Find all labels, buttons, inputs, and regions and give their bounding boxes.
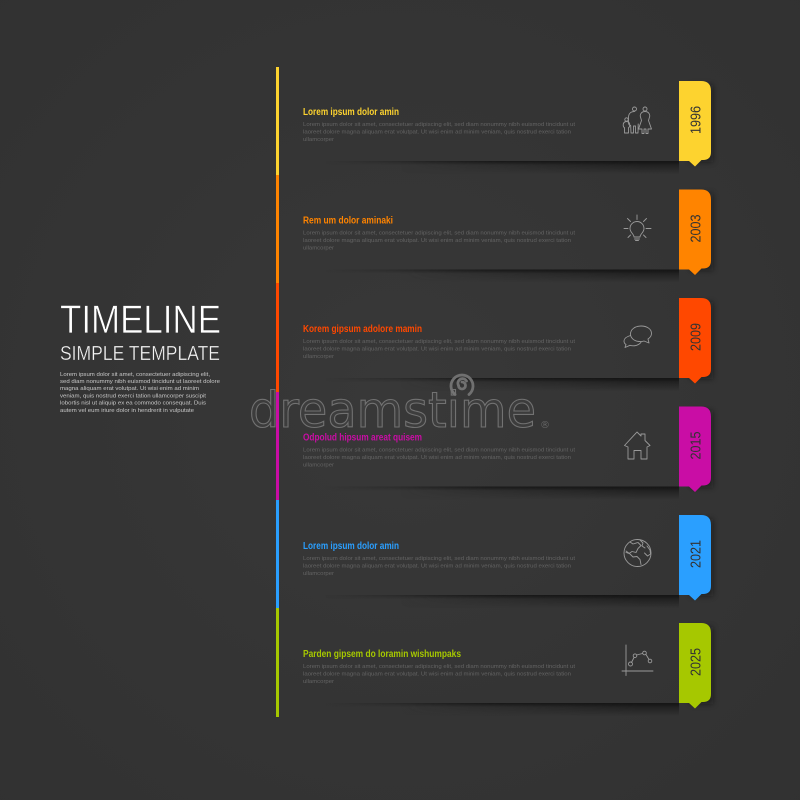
year: 2003	[688, 214, 704, 242]
year tab	[679, 623, 711, 708]
item description: laoreet dolore magna aliquam erat volutpat. Ut wisi enim ad minim veniam, quis nostrud exerci tation	[303, 346, 571, 352]
heading block	[60, 298, 221, 414]
item: 2021	[303, 515, 713, 608]
item: 2025	[303, 623, 713, 716]
tab shadow	[690, 194, 713, 270]
year: 1996	[688, 106, 704, 134]
watermark	[249, 375, 550, 439]
icon: globe	[624, 540, 651, 566]
watermark registered mark: ®	[540, 420, 550, 431]
year tab	[679, 298, 711, 384]
intro text	[60, 372, 220, 414]
item description: Lorem ipsum dolor sit amet, consectetuer adipiscing elit, sed diam nonummy nibh euismod tincidunt ut	[303, 230, 575, 236]
tab shadow	[690, 627, 713, 704]
tab shadow	[690, 85, 713, 162]
intro text: lobortis nisl ut aliquip ex ea commodo consequat. Duis	[60, 400, 206, 406]
timeline vertical line	[276, 67, 279, 717]
icon: speech bubbles	[624, 326, 652, 348]
item description	[303, 122, 575, 143]
year: 2015	[688, 432, 704, 460]
item description: ullamcorper	[303, 462, 334, 468]
item description: ullamcorper	[303, 137, 334, 143]
item description	[303, 230, 575, 252]
year tab	[679, 190, 711, 275]
item: 2015	[303, 406, 713, 500]
item: 2003	[303, 190, 713, 282]
icon: house	[624, 432, 650, 459]
card shadow	[378, 703, 679, 712]
item heading: Parden gipsem do loramin wishumpaks	[303, 649, 461, 660]
item description: laoreet dolore magna aliquam erat volutpat. Ut wisi enim ad minim veniam, quis nostrud exerci tation	[303, 238, 571, 244]
intro text: Lorem ipsum dolor sit amet, consectetuer adipiscing elit,	[60, 372, 210, 378]
card shadow	[378, 161, 679, 170]
intro text: veniam, quis nostrud exerci tation ullamcorper suscipit	[60, 394, 206, 400]
item: 1996	[303, 81, 713, 174]
item description	[303, 664, 575, 685]
subtitle: SIMPLE TEMPLATE	[60, 342, 220, 365]
card shadow	[373, 270, 679, 279]
item description: Lorem ipsum dolor sit amet, consectetuer adipiscing elit, sed diam nonummy nibh euismod tincidunt ut	[303, 556, 575, 562]
item description: laoreet dolore magna aliquam erat volutpat. Ut wisi enim ad minim veniam, quis nostrud exerci tation	[303, 564, 571, 570]
year tab	[679, 515, 711, 600]
tab shadow	[690, 410, 713, 488]
icon: line chart	[622, 645, 653, 676]
item description: ullamcorper	[303, 571, 334, 577]
item description: Lorem ipsum dolor sit amet, consectetuer adipiscing elit, sed diam nonummy nibh euismod tincidunt ut	[303, 664, 575, 670]
item description: Lorem ipsum dolor sit amet, consectetuer adipiscing elit, sed diam nonummy nibh euismod tincidunt ut	[303, 339, 575, 345]
item description: ullamcorper	[303, 679, 334, 685]
item description: laoreet dolore magna aliquam erat volutpat. Ut wisi enim ad minim veniam, quis nostrud exerci tation	[303, 672, 571, 678]
item description: ullamcorper	[303, 354, 334, 360]
item description: Lorem ipsum dolor sit amet, consectetuer adipiscing elit, sed diam nonummy nibh euismod tincidunt ut	[303, 448, 575, 454]
item heading: Odpolud hipsum areat quisem	[303, 432, 422, 444]
item heading: Rem um dolor aminaki	[303, 216, 393, 226]
item: 2009	[303, 298, 713, 391]
watermark spiral	[451, 375, 473, 394]
item description: laoreet dolore magna aliquam erat volutpat. Ut wisi enim ad minim veniam, quis nostrud exerci tation	[303, 130, 571, 136]
card shadow	[378, 595, 679, 604]
tab shadow	[690, 519, 713, 596]
year: 2021	[688, 540, 704, 568]
item heading: Lorem ipsum dolor amin	[303, 541, 399, 552]
item description	[303, 339, 575, 360]
watermark wordmark: dreamstime	[249, 382, 536, 439]
intro text: sed diam nonummy nibh euismod tincidunt ut laoreet dolore	[60, 379, 220, 385]
card shadow	[373, 378, 679, 388]
item heading: Korem gipsum adolore mamin	[303, 324, 422, 335]
intro text: autem vel eum iriure dolor in hendrerit in vulputate	[60, 408, 194, 414]
item description: laoreet dolore magna aliquam erat volutpat. Ut wisi enim ad minim veniam, quis nostrud exerci tation	[303, 455, 571, 461]
icon: light bulb	[624, 215, 651, 240]
tab shadow	[690, 302, 713, 379]
year tab	[679, 81, 711, 166]
title: TIMELINE	[60, 298, 221, 342]
year: 2025	[688, 648, 704, 676]
card shadow	[373, 486, 679, 496]
item description	[303, 448, 575, 468]
year tab	[679, 406, 711, 492]
year: 2009	[688, 323, 704, 351]
item description	[303, 556, 575, 577]
item description: ullamcorper	[303, 246, 334, 252]
item heading: Lorem ipsum dolor amin	[303, 107, 399, 118]
icon: family	[623, 107, 652, 134]
item description: Lorem ipsum dolor sit amet, consectetuer adipiscing elit, sed diam nonummy nibh euismod tincidunt ut	[303, 122, 575, 128]
intro text: magna aliquam erat volutpat. Ut wisi enim ad minim	[60, 386, 199, 392]
